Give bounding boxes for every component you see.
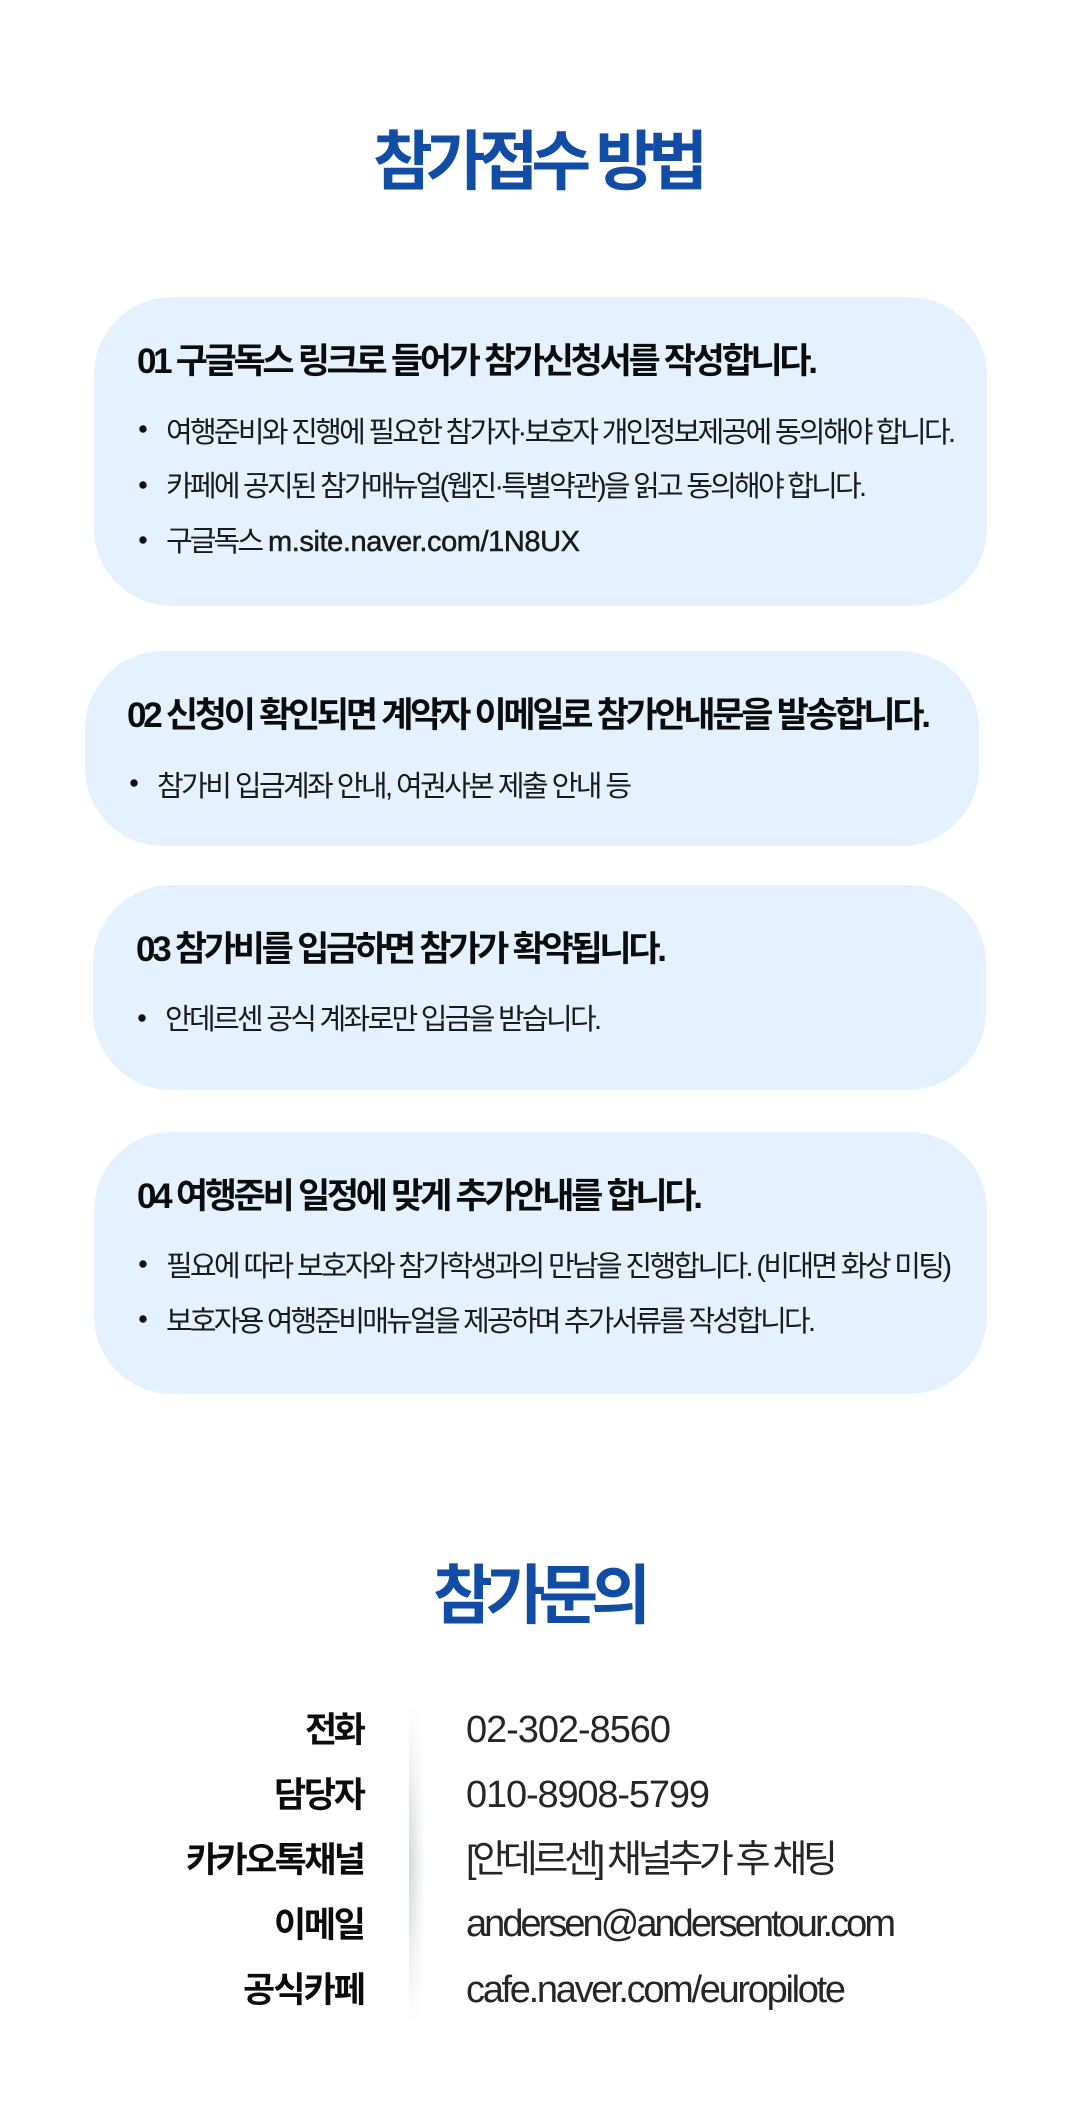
contact labels: 전화: [305, 1711, 366, 1750]
step 04 bullet list: 보호자용 여행준비매뉴얼을 제공하며 추가서류를 작성합니다.: [166, 1305, 816, 1338]
step 02 bullet list: 참가비 입금계좌 안내, 여권사본 제출 안내 등: [157, 770, 632, 803]
step 02 heading: 02 신청이 확인되면 계약자 이메일로 참가안내문을 발송합니다.: [127, 696, 931, 735]
contact labels: [186, 1711, 366, 2010]
contact labels: 카카오톡채널: [186, 1841, 366, 1880]
step 04 bullet list: [139, 1250, 952, 1338]
contact values: 010-8908-5799: [466, 1774, 710, 1816]
step 01 bullet list: [139, 416, 956, 558]
panel: step 03: [93, 885, 986, 1090]
step 01 bullet list: m.site.naver.com/1N8UX: [268, 526, 580, 558]
step 01 bullet list: 여행준비와 진행에 필요한 참가자·보호자 개인정보제공에 동의해야 합니다.: [166, 416, 956, 449]
step 01 bullet list: 구글독스: [166, 526, 264, 558]
title: 참가접수 방법: 참가접수 방법: [373, 109, 708, 203]
panel: step 02: [85, 651, 979, 846]
panel: step 04: [94, 1132, 987, 1394]
contact divider shadow: [409, 1735, 422, 1994]
title: 참가문의: 참가문의: [433, 1543, 651, 1637]
contact labels: 공식카페: [243, 1971, 366, 2010]
contact values: [466, 1709, 896, 2011]
step 03 heading: 03 참가비를 입금하면 참가가 확약됩니다.: [136, 930, 667, 969]
contact values: cafe.naver.com/europilote: [466, 1969, 846, 2011]
contact labels: 이메일: [274, 1906, 366, 1945]
step 01 heading: 01 구글독스 링크로 들어가 참가신청서를 작성합니다.: [137, 342, 818, 381]
panel: step 01: [94, 297, 987, 606]
step 04 heading: 04 여행준비 일정에 맞게 추가안내를 합니다.: [137, 1177, 703, 1216]
contact values: [안데르센] 채널추가 후 채팅: [466, 1839, 838, 1881]
contact labels: 담당자: [274, 1776, 366, 1815]
step 03 bullet list: 안데르센 공식 계좌로만 입금을 받습니다.: [165, 1003, 602, 1036]
contact values: andersen@andersentour.com: [466, 1903, 896, 1945]
contact values: 02-302-8560: [466, 1709, 671, 1751]
step 04 bullet list: 필요에 따라 보호자와 참가학생과의 만남을 진행합니다. (비대면 화상 미팅): [166, 1250, 952, 1283]
step 01 bullet list: 카페에 공지된 참가매뉴얼(웹진·특별약관)을 읽고 동의해야 합니다.: [166, 470, 867, 503]
